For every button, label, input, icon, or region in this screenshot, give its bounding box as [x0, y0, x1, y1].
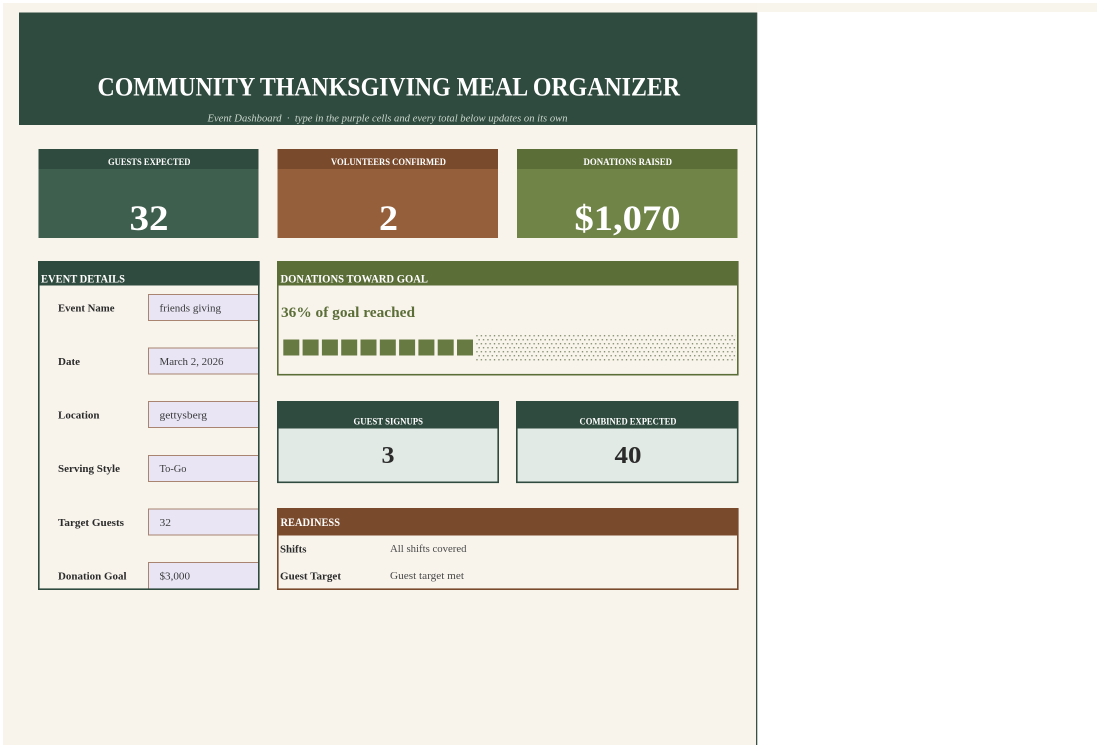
field: serving style: Serving Style: [58, 464, 120, 475]
heading: event details: EVENT DETAILS: [41, 274, 125, 286]
KPI card: donations raised: DONATIONS RAISED: [584, 158, 672, 168]
field: serving style: [58, 456, 258, 482]
row: guest target: [280, 571, 464, 582]
heading: readiness: READINESS: [280, 517, 340, 529]
subtitle: Event Dashboard · type in the purple cells and every total below updates on its own: [206, 114, 568, 124]
KPI card: volunteers confirmed: VOLUNTEERS CONFIRMED: [331, 158, 446, 168]
field: date: Date: [58, 357, 80, 368]
KPI card: guests expected: GUESTS EXPECTED: [108, 158, 191, 168]
row: guest target: Guest target met: [390, 571, 464, 582]
field: date: March 2, 2026: [160, 357, 224, 368]
field: location: gettysberg: [160, 410, 208, 422]
row: shifts: Shifts: [280, 544, 306, 556]
KPI card: donations raised: $1,070: [574, 198, 680, 238]
stat card: guest signups: GUEST SIGNUPS: [354, 418, 423, 428]
stat card: guest signups: 3: [382, 443, 394, 469]
title banner: [19, 12, 757, 745]
stat card: combined expected: 40: [614, 443, 642, 469]
KPI card: guests expected: 32: [130, 198, 168, 238]
progress bar: filled squares: [283, 340, 473, 356]
field: date: [58, 348, 258, 374]
KPI card: donations raised: [517, 149, 738, 238]
KPI card: volunteers confirmed: [278, 149, 498, 238]
progress bar: remaining dotted area: [476, 334, 736, 361]
row: shifts: All shifts covered: [390, 544, 467, 555]
stat card: combined expected: [516, 401, 738, 482]
field: serving style: To-Go: [160, 464, 186, 475]
field: location: [58, 402, 258, 428]
row: shifts: [280, 544, 467, 556]
field: event name: Event Name: [58, 304, 115, 314]
stat card: combined expected: COMBINED EXPECTED: [580, 418, 677, 428]
row: guest target: Guest Target: [280, 572, 342, 582]
field: donation goal: [58, 562, 258, 589]
field: event name: friends giving: [160, 304, 222, 314]
field: target guests: Target Guests: [58, 518, 124, 529]
field: target guests: 32: [160, 518, 171, 529]
field: location: Location: [58, 410, 100, 422]
field: event name: [58, 294, 258, 320]
panel: readiness: [277, 508, 738, 589]
panel: donations toward goal: [277, 261, 738, 375]
title: COMMUNITY THANKSGIVING MEAL ORGANIZER: [98, 72, 680, 102]
panel: event details: [38, 261, 260, 589]
KPI card: volunteers confirmed: 2: [379, 198, 398, 238]
KPI card: guests expected: [38, 149, 258, 238]
stat card: guest signups: [277, 401, 499, 482]
heading: donations toward goal: DONATIONS TOWARD GOAL: [280, 274, 428, 286]
field: donation goal: Donation Goal: [58, 572, 127, 582]
progress label: 36% of goal reached: [281, 305, 416, 321]
field: donation goal: $3,000: [160, 572, 190, 582]
field: target guests: [58, 509, 258, 535]
